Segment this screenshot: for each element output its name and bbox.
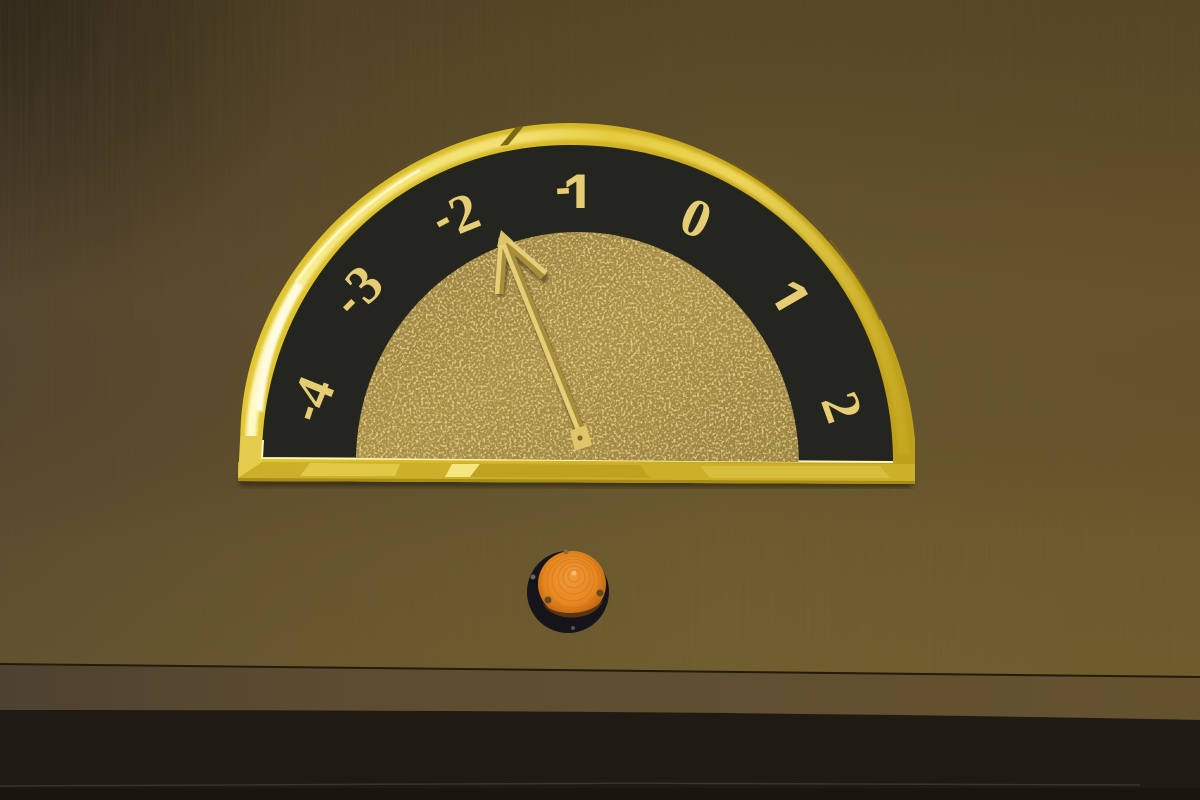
numeral -3: - (322, 278, 370, 326)
numeral 0: 0 (671, 185, 721, 251)
dial shadow (240, 478, 912, 488)
brass frame (238, 123, 915, 484)
numeral -2: 2 (440, 180, 488, 246)
ledge below the wall (0, 664, 1200, 720)
textured gold centre (350, 228, 805, 464)
numeral -4: - (278, 396, 332, 427)
numeral 1: 1 (750, 269, 825, 331)
numerals (298, 174, 860, 424)
lamp screws (544, 596, 552, 604)
black dial band (262, 145, 893, 462)
dial (238, 123, 915, 488)
dark lower panel (0, 710, 1200, 800)
numeral -1: 1 (562, 162, 596, 229)
numeral 2: 2 (809, 384, 875, 430)
numeral -4: 4 (281, 368, 347, 416)
lamp lens (538, 551, 606, 617)
arrow pointer (497, 230, 592, 451)
numeral -2: - (422, 192, 460, 245)
numeral -1 (557, 174, 585, 208)
amber warning lamp (527, 550, 609, 633)
frame inner highlight (262, 440, 893, 462)
numeral -1: - (554, 161, 572, 213)
lamp base (527, 551, 609, 633)
numeral -3: 3 (333, 253, 395, 315)
